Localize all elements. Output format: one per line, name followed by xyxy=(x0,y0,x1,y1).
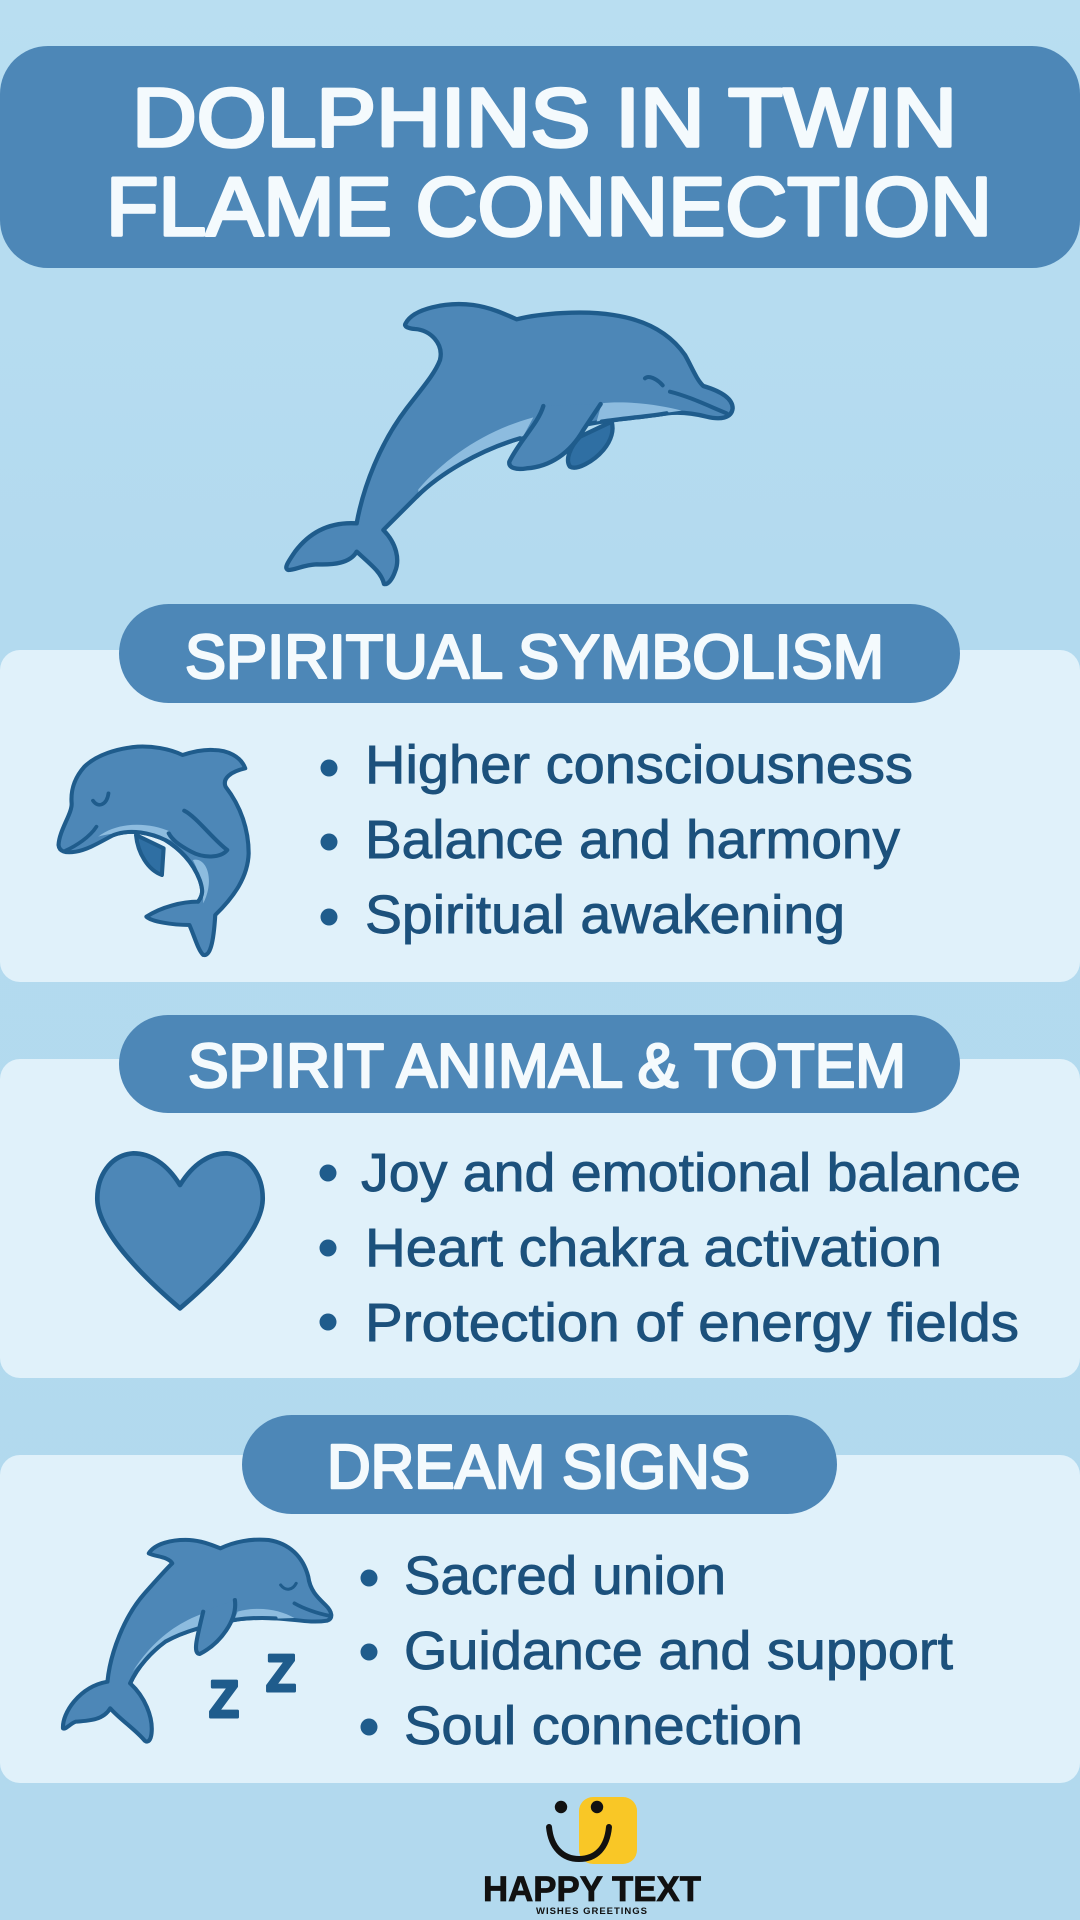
icon: smiley logo mark xyxy=(549,1797,637,1864)
heading pill: spiritual symbolism: SPIRITUAL SYMBOLISM xyxy=(185,623,884,692)
panel: dream signs xyxy=(0,1415,1080,1783)
panel: spiritual symbolism xyxy=(0,604,1080,982)
title banner xyxy=(0,46,1080,268)
bullet list: spirit animal and totem: Heart chakra activation xyxy=(365,1218,942,1278)
bullet list: spiritual symbolism: Balance and harmony xyxy=(365,810,900,870)
bullet list: spiritual symbolism: Higher consciousness xyxy=(365,735,913,795)
icon: curled dolphin xyxy=(59,747,249,955)
panel: spirit animal and totem xyxy=(0,1015,1080,1378)
title text: DOLPHINS IN TWIN xyxy=(132,71,957,164)
bullet list: spirit animal and totem xyxy=(320,1143,1021,1353)
heading pill: spirit animal and totem: SPIRIT ANIMAL & TOTEM xyxy=(188,1032,906,1101)
logo wordmark: WISHES GREETINGS xyxy=(536,1906,647,1917)
bullet list: dream signs: Guidance and support xyxy=(404,1621,953,1681)
title text xyxy=(106,71,992,253)
bullet list: dream signs: Sacred union xyxy=(404,1546,726,1606)
heading pill: dream signs xyxy=(242,1415,837,1514)
icon: heart xyxy=(97,1153,263,1308)
bullet list: dream signs: Soul connection xyxy=(404,1696,803,1756)
heading pill: spirit animal and totem xyxy=(119,1015,960,1113)
icon: sleep z letters xyxy=(209,1645,296,1729)
logo: happy text xyxy=(483,1797,701,1917)
icon: sleep z letters: Z xyxy=(266,1645,296,1703)
icon: sleeping dolphin xyxy=(63,1540,331,1742)
heading pill: dream signs: DREAM SIGNS xyxy=(327,1433,750,1502)
bullet list: spiritual symbolism xyxy=(320,735,913,945)
logo wordmark: HAPPY TEXT xyxy=(483,1870,701,1909)
icon: leaping dolphin xyxy=(286,304,733,584)
bullet list: spirit animal and totem: Protection of energy fields xyxy=(365,1293,1019,1353)
title text: FLAME CONNECTION xyxy=(106,160,992,253)
icon: sleep z letters: Z xyxy=(209,1671,239,1729)
bullet list: spiritual symbolism: Spiritual awakening xyxy=(365,885,845,945)
bullet list: spirit animal and totem: Joy and emotional balance xyxy=(361,1143,1021,1203)
bullet list: dream signs xyxy=(360,1546,953,1756)
heading pill: spiritual symbolism xyxy=(119,604,960,703)
